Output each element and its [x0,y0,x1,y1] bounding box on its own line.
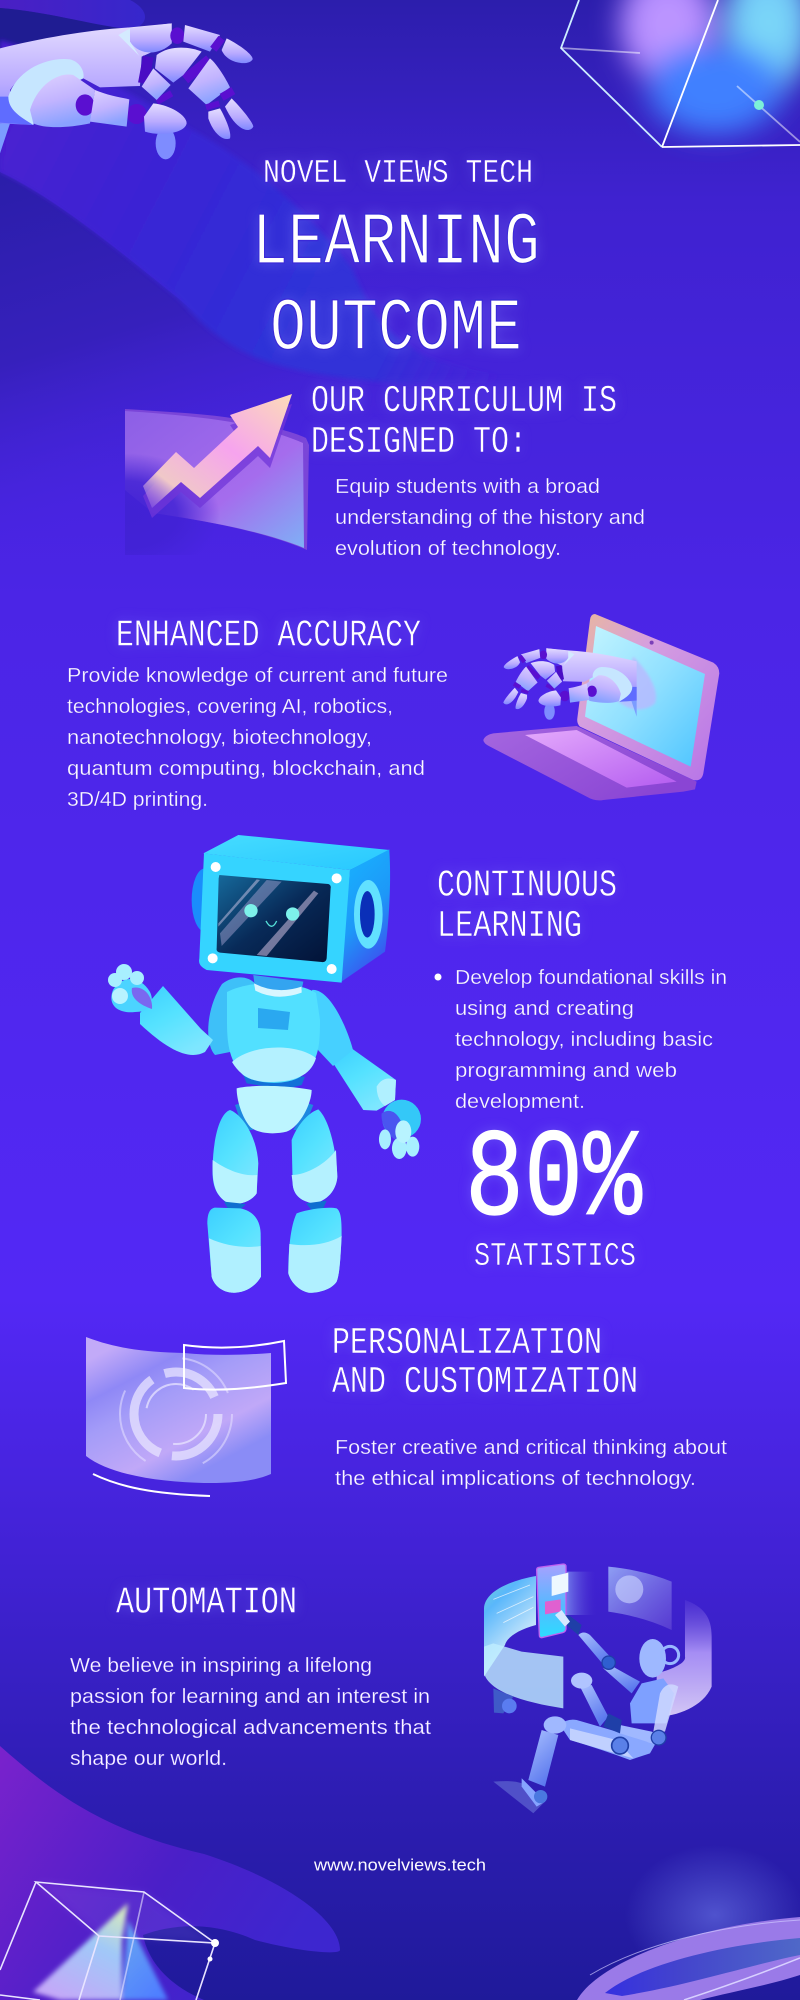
text: curriculum body: Equip students with a broad [335,475,600,498]
heading: continuous learning: LEARNING [437,905,582,948]
heading: our curriculum [311,380,617,464]
decoration: bottom-left glowing cube with pyramid [0,1882,219,2000]
text: automation body: the technological advancements that [70,1716,431,1739]
icon: chart panel with rising arrow [125,394,309,555]
decoration: top-right glowing cube [561,0,800,147]
icon: laptop with robot hand [483,614,719,800]
section: automation [70,1582,431,1770]
robot legs and body [207,1048,421,1293]
title: LEARNING [252,202,540,286]
icon: robot with holographic ring [484,1564,712,1813]
text: continuous learning body: development. [455,1090,585,1113]
heading: continuous learning [437,864,617,948]
section: personalization [332,1322,727,1490]
text: automation body [70,1654,431,1770]
label: statistics: STATISTICS [474,1238,636,1275]
text: enhanced accuracy body: nanotechnology, biotechnology, [67,726,372,749]
text: automation body: shape our world. [70,1747,227,1770]
heading: our curriculum: OUR CURRICULUM IS [311,380,617,423]
title: OUTCOME [270,288,522,372]
section: continuous learning [434,864,727,1113]
text: personalization body: Foster creative and critical thinking about [335,1436,727,1459]
text: curriculum body: evolution of technology. [335,537,561,560]
robot torso and arms [108,964,353,1083]
pretitle: NOVEL VIEWS TECH [263,155,533,192]
text: enhanced accuracy body: 3D/4D printing. [67,788,208,811]
text: continuous learning body: using and creating [455,997,634,1020]
robot head [192,835,390,997]
footer url: www.novelviews.tech [313,1856,486,1874]
text: continuous learning body: programming and web [455,1059,677,1082]
text: enhanced accuracy body: technologies, covering AI, robotics, [67,695,393,718]
title [252,202,540,372]
heading: our curriculum: DESIGNED TO: [311,421,527,464]
bullet [434,974,442,980]
heading: enhanced accuracy: ENHANCED ACCURACY [116,614,421,658]
text: continuous learning body: Develop foundational skills in [455,966,727,989]
text: personalization body: the ethical implications of technology. [335,1467,696,1490]
text: curriculum body: understanding of the history and [335,506,645,529]
heading: automation: AUTOMATION [116,1582,297,1624]
decoration: bottom-right ring [577,1917,800,2000]
icon: robot hand top left [0,23,253,159]
text: enhanced accuracy body: Provide knowledge of current and future [67,664,448,687]
text: continuous learning body: technology, including basic [455,1028,713,1051]
text: automation body: passion for learning and an interest in [70,1685,430,1708]
text: enhanced accuracy body: quantum computing, blockchain, and [67,757,425,780]
section: enhanced accuracy [67,614,448,811]
statistic: 80 percent: 80% [465,1112,642,1252]
text: personalization body [335,1436,727,1490]
heading: continuous learning: CONTINUOUS [437,864,617,908]
text: continuous learning body [455,966,727,1113]
heading: personalization and customization: AND CUSTOMIZATION [332,1361,638,1404]
heading: personalization and customization [332,1322,638,1404]
heading: personalization and customization: PERSONALIZATION [332,1322,602,1365]
text: automation body: We believe in inspiring a lifelong [70,1654,372,1677]
text: enhanced accuracy body [67,664,448,811]
text: curriculum body [335,475,645,560]
icon: holographic panel [86,1337,286,1496]
section: curriculum [311,380,645,560]
icon: blue robot [108,835,421,1293]
